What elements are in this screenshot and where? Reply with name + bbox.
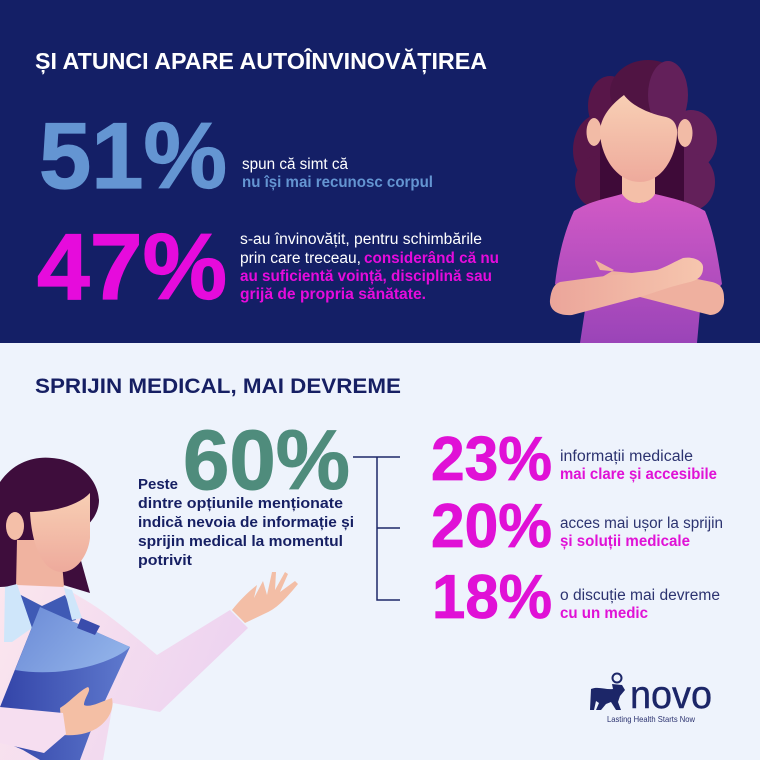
text block: 60% description: potrivit	[138, 552, 192, 569]
text block: 51% description: spun că simt că	[242, 156, 348, 173]
text block: 18%: cu un medic	[560, 605, 648, 622]
scrub top	[17, 593, 76, 630]
neck	[16, 540, 64, 606]
text block: 51% description	[242, 156, 433, 191]
stat: 23%: 23%	[431, 425, 552, 494]
heading: medical support: SPRIJIN MEDICAL, MAI DEVREME	[35, 375, 401, 398]
stat: 20%: 20%	[431, 492, 552, 561]
bracket connector	[353, 457, 400, 600]
text block: 23%: informații medicale	[560, 448, 693, 465]
tagline: Lasting Health Starts Now	[607, 714, 696, 724]
text block: 18%: o discuție mai devreme	[560, 587, 720, 604]
stat: 60%: 60%	[183, 413, 350, 507]
neck	[622, 172, 655, 203]
stat: 47%: 47%	[37, 214, 227, 319]
illustration: doctor with clipboard	[0, 458, 298, 760]
icon: bull	[590, 674, 625, 710]
text block: 20%	[560, 515, 723, 550]
panel: top dark section	[0, 0, 760, 343]
lower sleeve	[0, 707, 66, 753]
illustration: woman with crossed arms	[550, 60, 724, 343]
face	[600, 95, 677, 182]
text block: 18%	[560, 587, 720, 622]
heading: self-blame: ȘI ATUNCI APARE AUTOÎNVINOVĂȚIREA	[35, 47, 487, 75]
text block: 60% description	[138, 476, 354, 569]
text block: 60% description: sprijin medical la momentul	[138, 533, 343, 550]
text block: 20%: și soluții medicale	[560, 533, 690, 550]
shirt	[555, 194, 722, 343]
face	[30, 493, 90, 572]
stat: 51%: 51%	[39, 103, 227, 208]
raised hand	[232, 572, 298, 623]
text block: 51% description: nu își mai recunosc corpul	[242, 174, 433, 191]
text block: 23%	[560, 448, 717, 483]
text block: 47% description: considerând că nu	[364, 250, 499, 267]
text block: 20%: acces mai ușor la sprijin	[560, 515, 723, 532]
text block: 47% description: grijă de propria sănătate.	[240, 286, 426, 303]
clipboard highlight	[15, 607, 130, 672]
text block: 60% description: Peste	[138, 476, 178, 493]
text block: 23%: mai clare și accesibile	[560, 466, 717, 483]
text block: 47% description: s-au învinovățit, pentru schimbările	[240, 231, 482, 248]
text block: 47% description	[240, 231, 499, 303]
logo: novo	[590, 674, 712, 724]
clip	[77, 618, 100, 635]
wordmark: novo	[630, 674, 712, 717]
coat	[0, 585, 248, 760]
text block: 47% description: au suficientă voință, disciplină sau	[240, 268, 492, 285]
left arm	[550, 258, 703, 315]
lapels	[4, 584, 82, 642]
ears	[586, 118, 602, 146]
back hair	[0, 458, 99, 593]
text block: 60% description: dintre opțiunile menționate	[138, 495, 343, 512]
panel: bottom light section	[0, 343, 760, 760]
clipboard	[0, 607, 130, 760]
right arm	[595, 260, 724, 315]
ear	[6, 512, 24, 540]
hair	[573, 60, 717, 210]
text block: 47% description: prin care treceau,	[240, 250, 361, 267]
stat: 18%: 18%	[432, 563, 552, 632]
hand holding clipboard	[60, 687, 112, 735]
text block: 60% description: indică nevoia de informație și	[138, 514, 354, 531]
